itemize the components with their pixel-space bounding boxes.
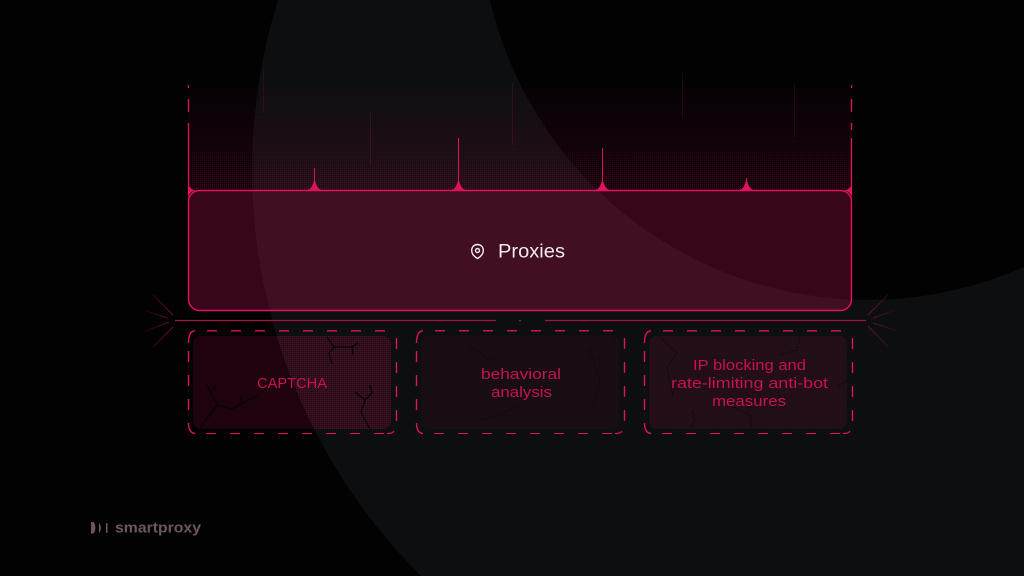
panel: behavioral analysis bbox=[416, 331, 624, 434]
panel: proxies bbox=[188, 190, 852, 310]
behavioral analysis label: behavioral bbox=[481, 366, 561, 383]
wordmark: smartproxy bbox=[115, 520, 201, 536]
panel: faded top column area bbox=[188, 70, 852, 199]
divider with sparks bbox=[143, 295, 898, 347]
panel: IP blocking bbox=[644, 331, 852, 434]
proxies label: Proxies bbox=[498, 240, 565, 262]
IP blocking label: IP blocking and bbox=[693, 357, 806, 374]
behavioral analysis label: analysis bbox=[491, 384, 552, 401]
icon: location pin bbox=[472, 244, 483, 258]
cracks bbox=[660, 337, 848, 428]
cracks bbox=[470, 345, 600, 420]
captcha label: CAPTCHA bbox=[257, 375, 327, 392]
panel: captcha bbox=[188, 331, 396, 434]
cracks bbox=[200, 337, 372, 429]
icon: logo bars bbox=[91, 522, 108, 534]
IP blocking label: measures bbox=[712, 393, 786, 410]
IP blocking label: rate-limiting anti-bot bbox=[671, 375, 829, 392]
logo: smartproxy bbox=[91, 520, 201, 536]
